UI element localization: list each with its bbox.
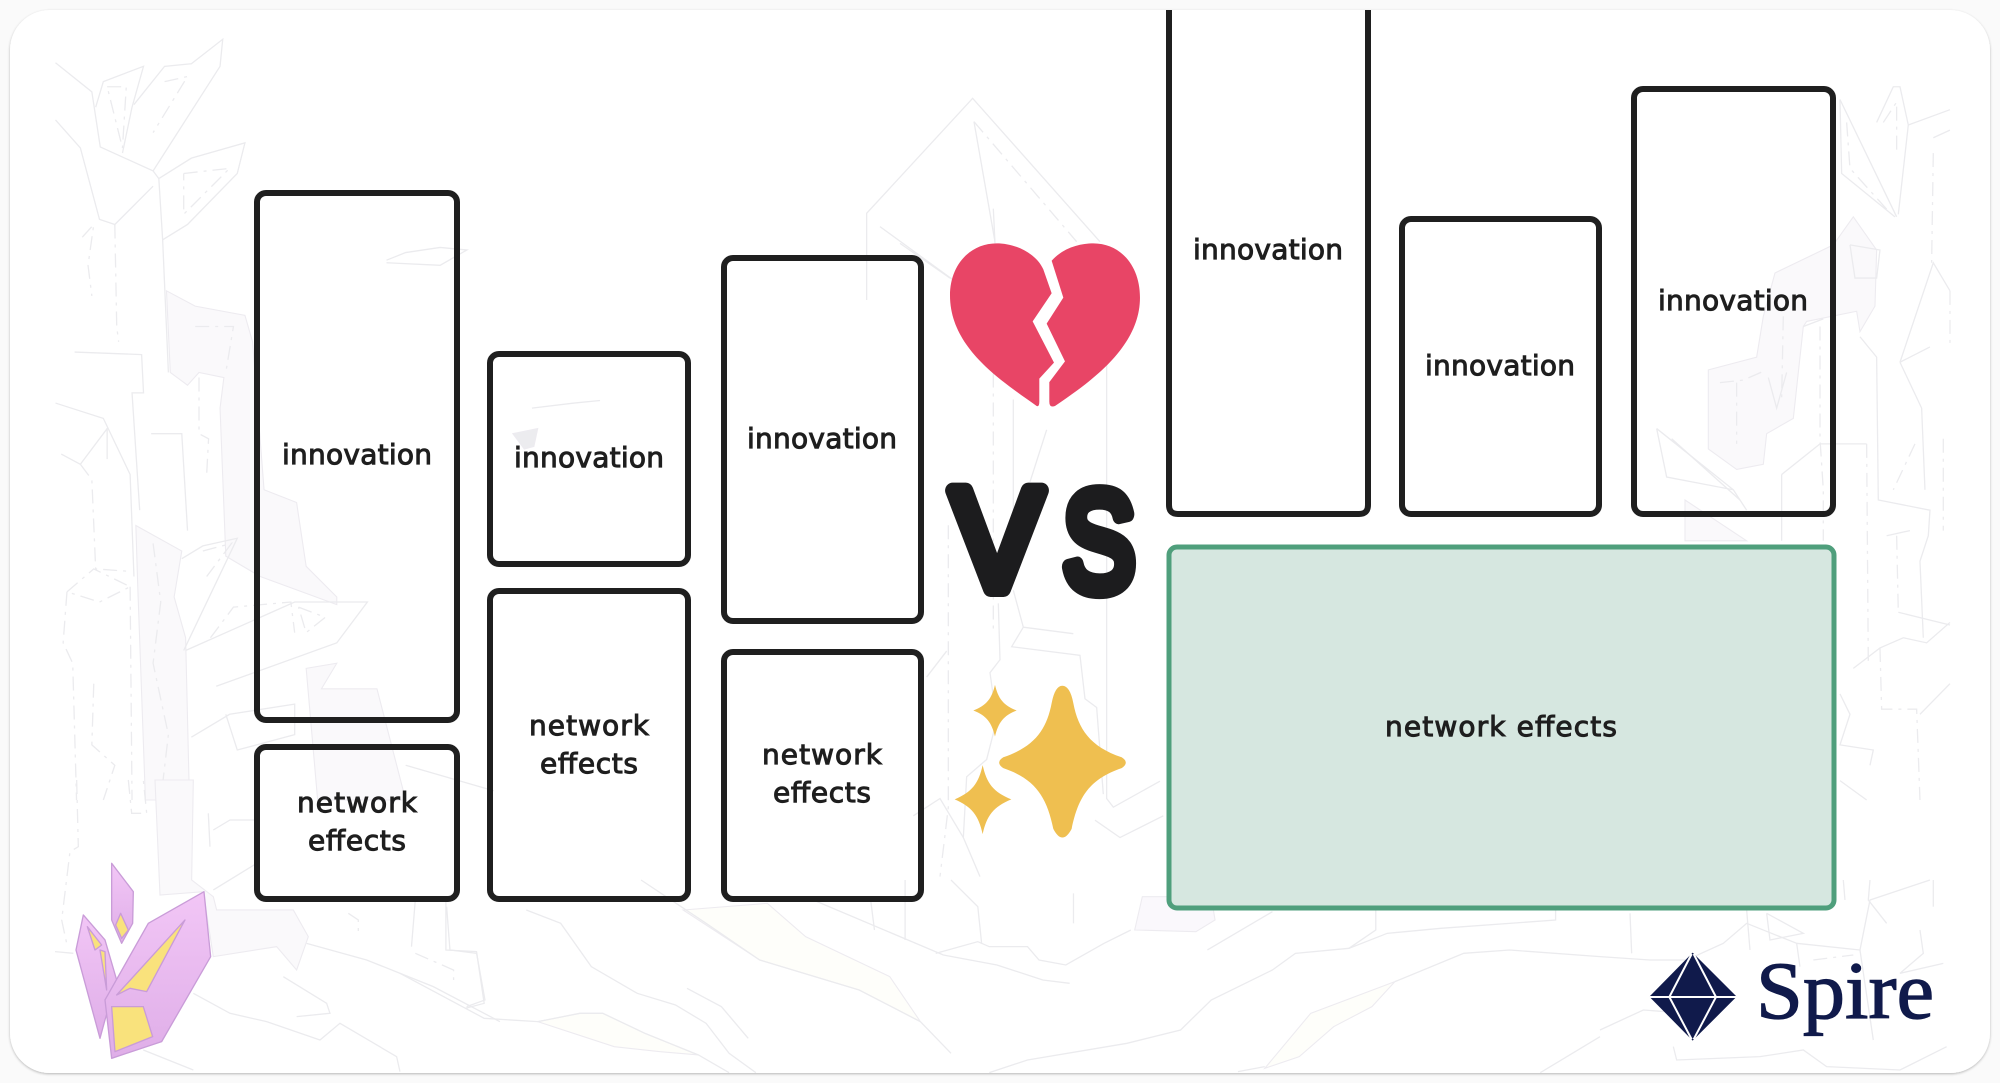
box: network effects: effects	[308, 824, 406, 857]
VS label: V	[952, 460, 1042, 620]
box: innovation: innovation	[282, 438, 432, 471]
box: innovation: innovation	[1425, 349, 1575, 382]
box: innovation: innovation	[1658, 284, 1808, 317]
icon: Spire diamond	[1649, 953, 1737, 1041]
box: innovation	[257, 193, 457, 720]
wordmark: Spire	[1756, 945, 1934, 1036]
box: network effects	[490, 591, 688, 899]
box: innovation	[1169, 10, 1368, 514]
box: innovation: innovation	[747, 422, 897, 455]
VS label: S	[1063, 463, 1135, 620]
box: network effects	[257, 747, 457, 899]
logo: Spire	[1649, 945, 1934, 1041]
box: innovation: innovation	[1193, 233, 1343, 266]
box: network effects: network	[762, 738, 883, 771]
chart 1: innovation block, low network effects	[257, 193, 457, 899]
box: innovation	[490, 354, 688, 564]
icon: sparkles	[955, 685, 1126, 838]
chart 2: innovation and network effects	[490, 354, 688, 899]
box: innovation	[1634, 89, 1833, 514]
box: network effects	[724, 652, 921, 899]
box: network effects, green	[1169, 547, 1834, 908]
box: network effects: network	[529, 709, 650, 742]
VS label	[952, 460, 1135, 620]
box: network effects: effects	[540, 747, 638, 780]
box: innovation	[724, 258, 921, 621]
box: innovation	[1402, 219, 1599, 514]
box: network effects: effects	[773, 776, 871, 809]
chart 3: innovation and network effects	[724, 258, 921, 899]
icon: broken heart	[950, 243, 1140, 407]
icon: crystal mascot	[76, 863, 211, 1058]
box: innovation: innovation	[514, 441, 664, 474]
box: network effects, green: network effects	[1385, 710, 1617, 743]
chart 4: high innovation with strong network effects	[1169, 10, 1834, 908]
box: network effects: network	[297, 786, 418, 819]
